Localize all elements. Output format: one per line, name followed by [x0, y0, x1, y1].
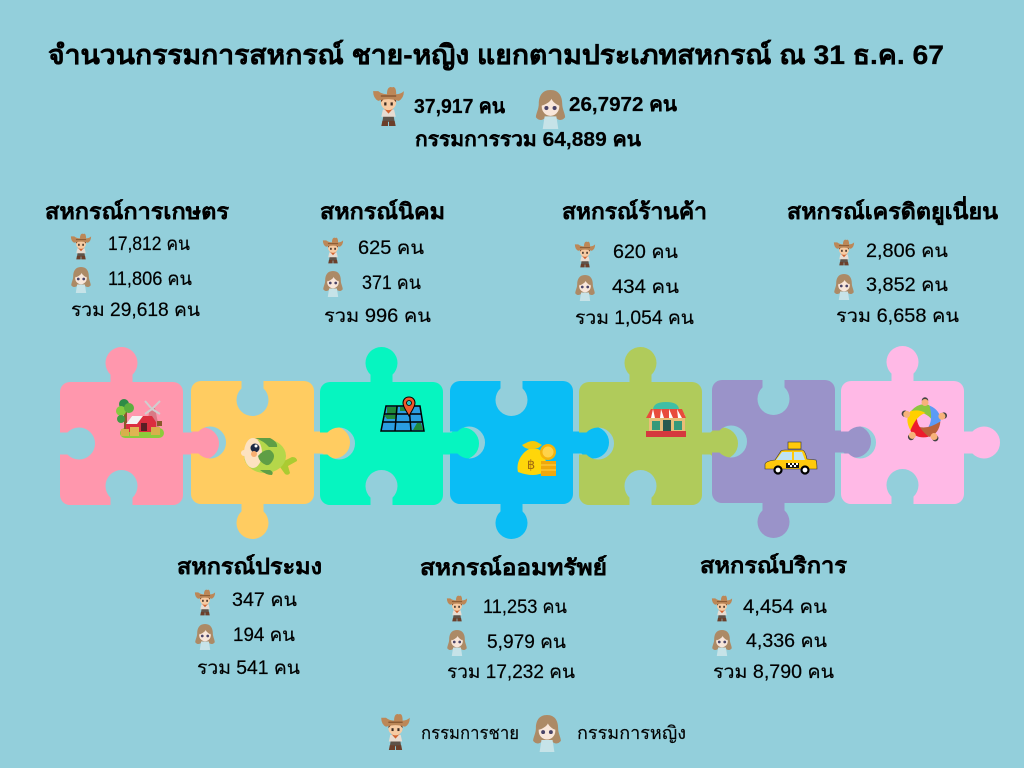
icon: female: [575, 275, 595, 301]
summary totals: [373, 87, 677, 151]
female count: 194 คน: [233, 625, 295, 646]
panel: store cooperative: [562, 199, 707, 329]
panel: settlement cooperative: [320, 199, 445, 327]
icon: money bag with coins: [517, 441, 556, 476]
puzzle piece: agriculture: [60, 347, 219, 505]
icon: female: [447, 630, 467, 656]
icon: male: [447, 596, 467, 621]
total: รวม 17,232 คน: [447, 662, 575, 683]
icon: circle of people: [901, 397, 948, 443]
male count: 2,806 คน: [866, 241, 948, 262]
puzzle piece: store: [579, 347, 738, 505]
title: จำนวนกรรมการสหกรณ์ ชาย-หญิง แยกตามประเภทสหกรณ์ ณ 31 ธ.ค. 67: [48, 39, 944, 71]
icon: male: [712, 596, 732, 621]
heading: สหกรณ์บริการ: [700, 553, 847, 578]
female count: 434 คน: [612, 277, 679, 298]
male count: 625 คน: [358, 238, 424, 259]
male count: 17,812 คน: [108, 234, 190, 255]
icon: male: [834, 240, 854, 265]
heading: สหกรณ์ร้านค้า: [562, 199, 707, 224]
female count: 3,852 คน: [866, 275, 948, 296]
icon: fish: [241, 438, 297, 475]
icon: male: [323, 238, 343, 263]
female count: 4,336 คน: [746, 631, 827, 652]
total: รวม 996 คน: [324, 306, 431, 327]
icon: male: [71, 234, 91, 259]
icon: female: [834, 274, 854, 300]
panel: credit union cooperative: [787, 195, 998, 327]
total: รวม 541 คน: [197, 658, 300, 679]
total: รวม 29,618 คน: [71, 300, 200, 321]
panel: agricultural cooperative: [45, 199, 229, 321]
female total: 26,7972 คน: [569, 94, 677, 116]
icon: male: [195, 590, 215, 615]
legend icon: male: [381, 714, 410, 750]
puzzle piece: service: [712, 380, 871, 538]
icon: female: [323, 271, 343, 297]
icon: female: [712, 630, 732, 656]
legend label: male: กรรมการชาย: [421, 723, 519, 743]
panel: service cooperative: [700, 553, 847, 683]
female count: 11,806 คน: [108, 269, 192, 290]
male total: 37,917 คน: [414, 96, 505, 118]
heading: สหกรณ์นิคม: [320, 199, 445, 224]
icon: taxi: [765, 442, 817, 474]
heading: สหกรณ์การเกษตร: [45, 199, 229, 224]
puzzle piece: savings: [450, 381, 609, 539]
legend icon: female: [533, 715, 561, 752]
puzzle piece: settlement: [320, 347, 479, 505]
legend: [381, 714, 686, 752]
puzzle piece: credit union: [841, 346, 1000, 504]
overall total: กรรมการรวม 64,889 คน: [415, 129, 641, 151]
total: รวม 6,658 คน: [836, 306, 959, 327]
panel: fisheries cooperative: [177, 554, 322, 679]
total: รวม 8,790 คน: [713, 662, 834, 683]
icon: female: [71, 267, 91, 293]
icon: female director: [536, 90, 565, 129]
male count: 11,253 คน: [483, 597, 567, 618]
icon: map with pin: [381, 397, 424, 431]
female count: 5,979 คน: [487, 632, 566, 653]
icon: female: [195, 624, 215, 650]
heading: สหกรณ์ออมทรัพย์: [420, 555, 607, 580]
icon: shop: [646, 402, 686, 437]
icon: farm barn: [116, 399, 164, 438]
male count: 620 คน: [613, 242, 678, 263]
female count: 371 คน: [362, 273, 421, 294]
male count: 347 คน: [232, 590, 297, 611]
puzzle piece: fisheries: [191, 381, 350, 539]
heading: สหกรณ์ประมง: [177, 554, 322, 579]
panel: savings cooperative: [420, 555, 607, 683]
icon: money bag with coins: ฿: [527, 457, 535, 472]
total: รวม 1,054 คน: [575, 308, 694, 329]
heading: สหกรณ์เครดิตยูเนี่ยน: [787, 195, 998, 226]
icon: male: [575, 242, 595, 267]
puzzle chain: [60, 346, 1000, 539]
legend label: female: กรรมการหญิง: [577, 723, 686, 743]
icon: male director: [373, 87, 404, 126]
male count: 4,454 คน: [743, 597, 827, 618]
